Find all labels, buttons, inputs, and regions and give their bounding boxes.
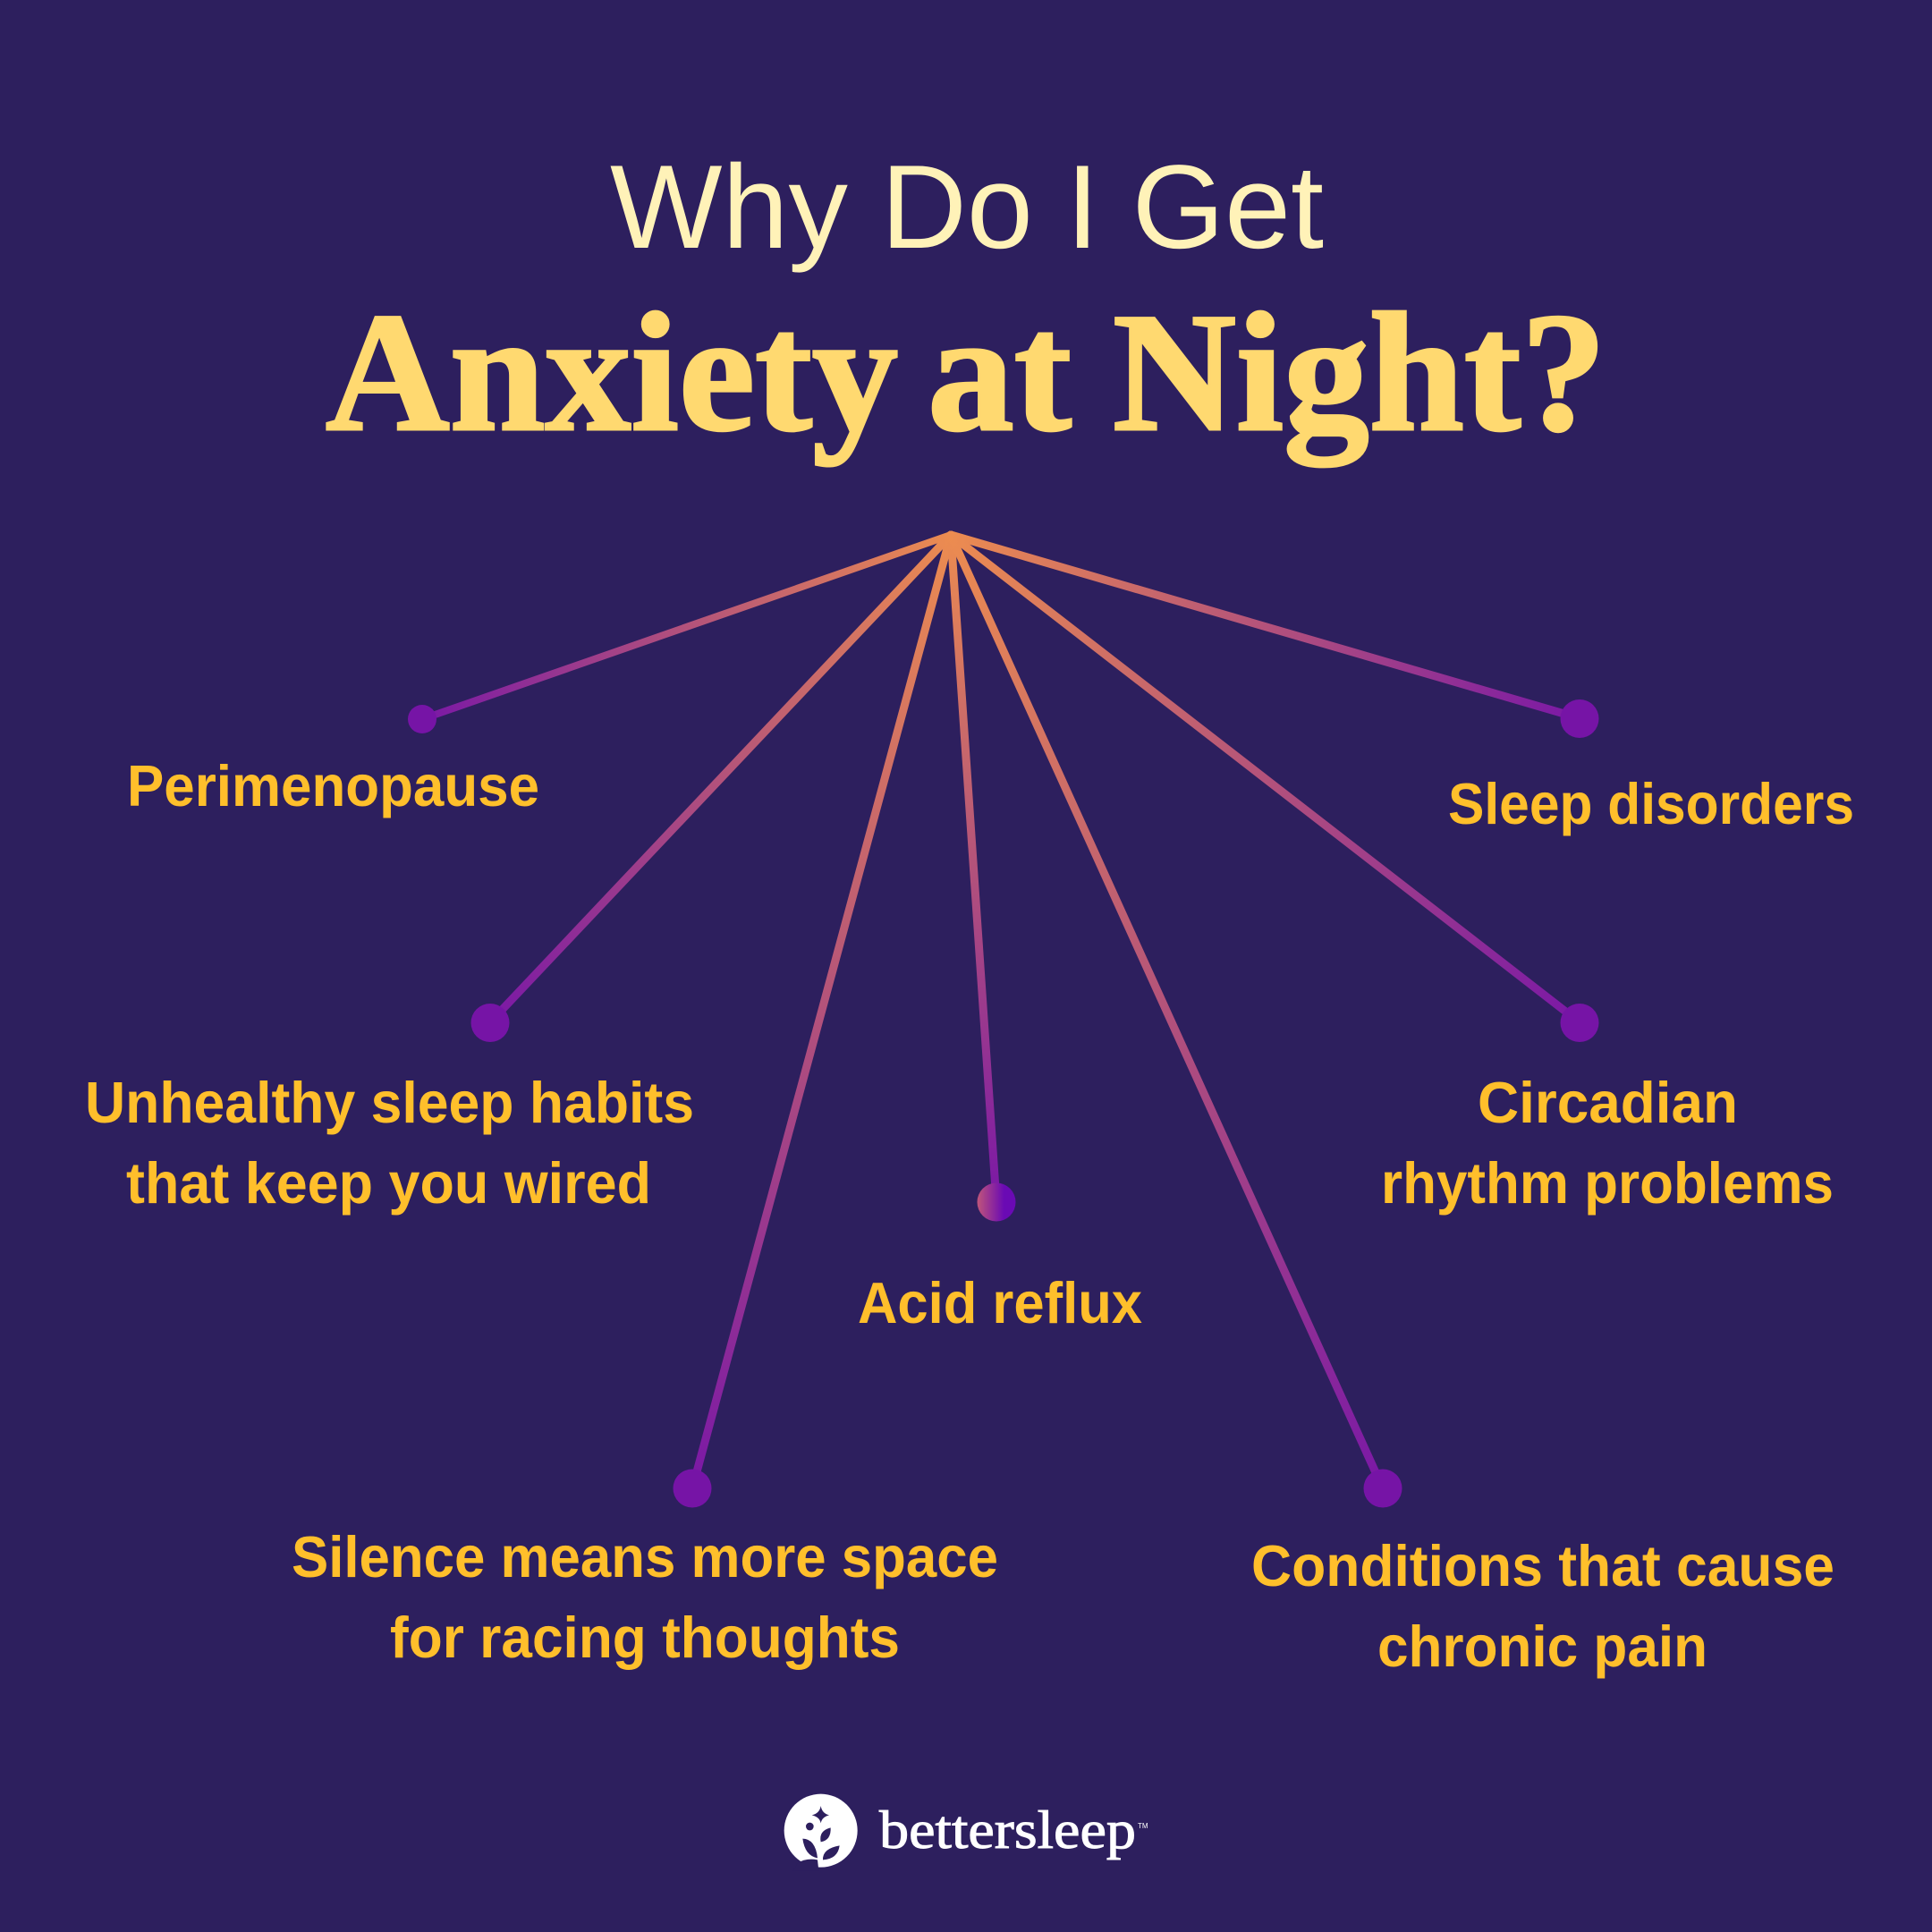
- label: Unhealthy sleep habits: that keep you wired: [126, 1150, 651, 1216]
- label: Silence means more space for racing thoughts: for racing thoughts: [390, 1605, 900, 1670]
- label: Conditions that cause chronic pain: [1251, 1533, 1835, 1679]
- line: to Circadian: [951, 535, 1580, 1022]
- label: Unhealthy sleep habits: [85, 1070, 694, 1216]
- label: Conditions that cause chronic pain: Conditions that cause: [1251, 1533, 1835, 1598]
- dot: Perimenopause: [408, 705, 436, 733]
- label: Unhealthy sleep habits: Unhealthy sleep habits: [85, 1070, 694, 1135]
- label: Conditions that cause chronic pain: chronic pain: [1377, 1614, 1707, 1679]
- line: to Acid reflux: [951, 535, 996, 1202]
- trademark: TM: [1138, 1822, 1148, 1830]
- line: to Unhealthy sleep habits: [490, 535, 951, 1022]
- dot: Silence: [673, 1469, 712, 1508]
- line: to Silence: [692, 535, 951, 1488]
- title line: Why Do I Get: Why Do I Get: [610, 141, 1324, 274]
- label: Sleep disorders: Sleep disorders: [1448, 771, 1854, 836]
- dot: Conditions: [1363, 1469, 1402, 1508]
- title line: Anxiety at Night?: Night?: [1113, 279, 1606, 467]
- label: Silence means more space for racing thoughts: [292, 1524, 998, 1670]
- icon: moon with plant and star: [784, 1794, 858, 1871]
- label: Acid reflux: Acid reflux: [858, 1270, 1142, 1335]
- dot: Sleep disorders: [1560, 699, 1599, 738]
- label: Circadian rhythm problems: [1381, 1070, 1834, 1216]
- label: Circadian rhythm problems: rhythm problems: [1381, 1150, 1834, 1216]
- title line: Anxiety at Night?: at: [928, 279, 1072, 467]
- dot: Circadian: [1560, 1004, 1599, 1042]
- line: to Sleep disorders: [951, 535, 1580, 718]
- label: Circadian rhythm problems: Circadian: [1478, 1070, 1738, 1135]
- label: Silence means more space for racing thoughts: Silence means more space: [292, 1524, 998, 1589]
- title line: Anxiety at Night?: [326, 279, 1606, 467]
- line: to Conditions: [951, 535, 1383, 1488]
- line: to Perimenopause: [422, 535, 951, 719]
- title line: Anxiety at Night?: Anxiety: [326, 279, 898, 467]
- wordmark: bettersleep: [879, 1801, 1136, 1860]
- dot: Acid reflux: [977, 1182, 1016, 1222]
- logo: bettersleep: [784, 1794, 1148, 1871]
- label: Perimenopause: Perimenopause: [127, 753, 539, 818]
- dot: Unhealthy sleep habits: [470, 1004, 510, 1042]
